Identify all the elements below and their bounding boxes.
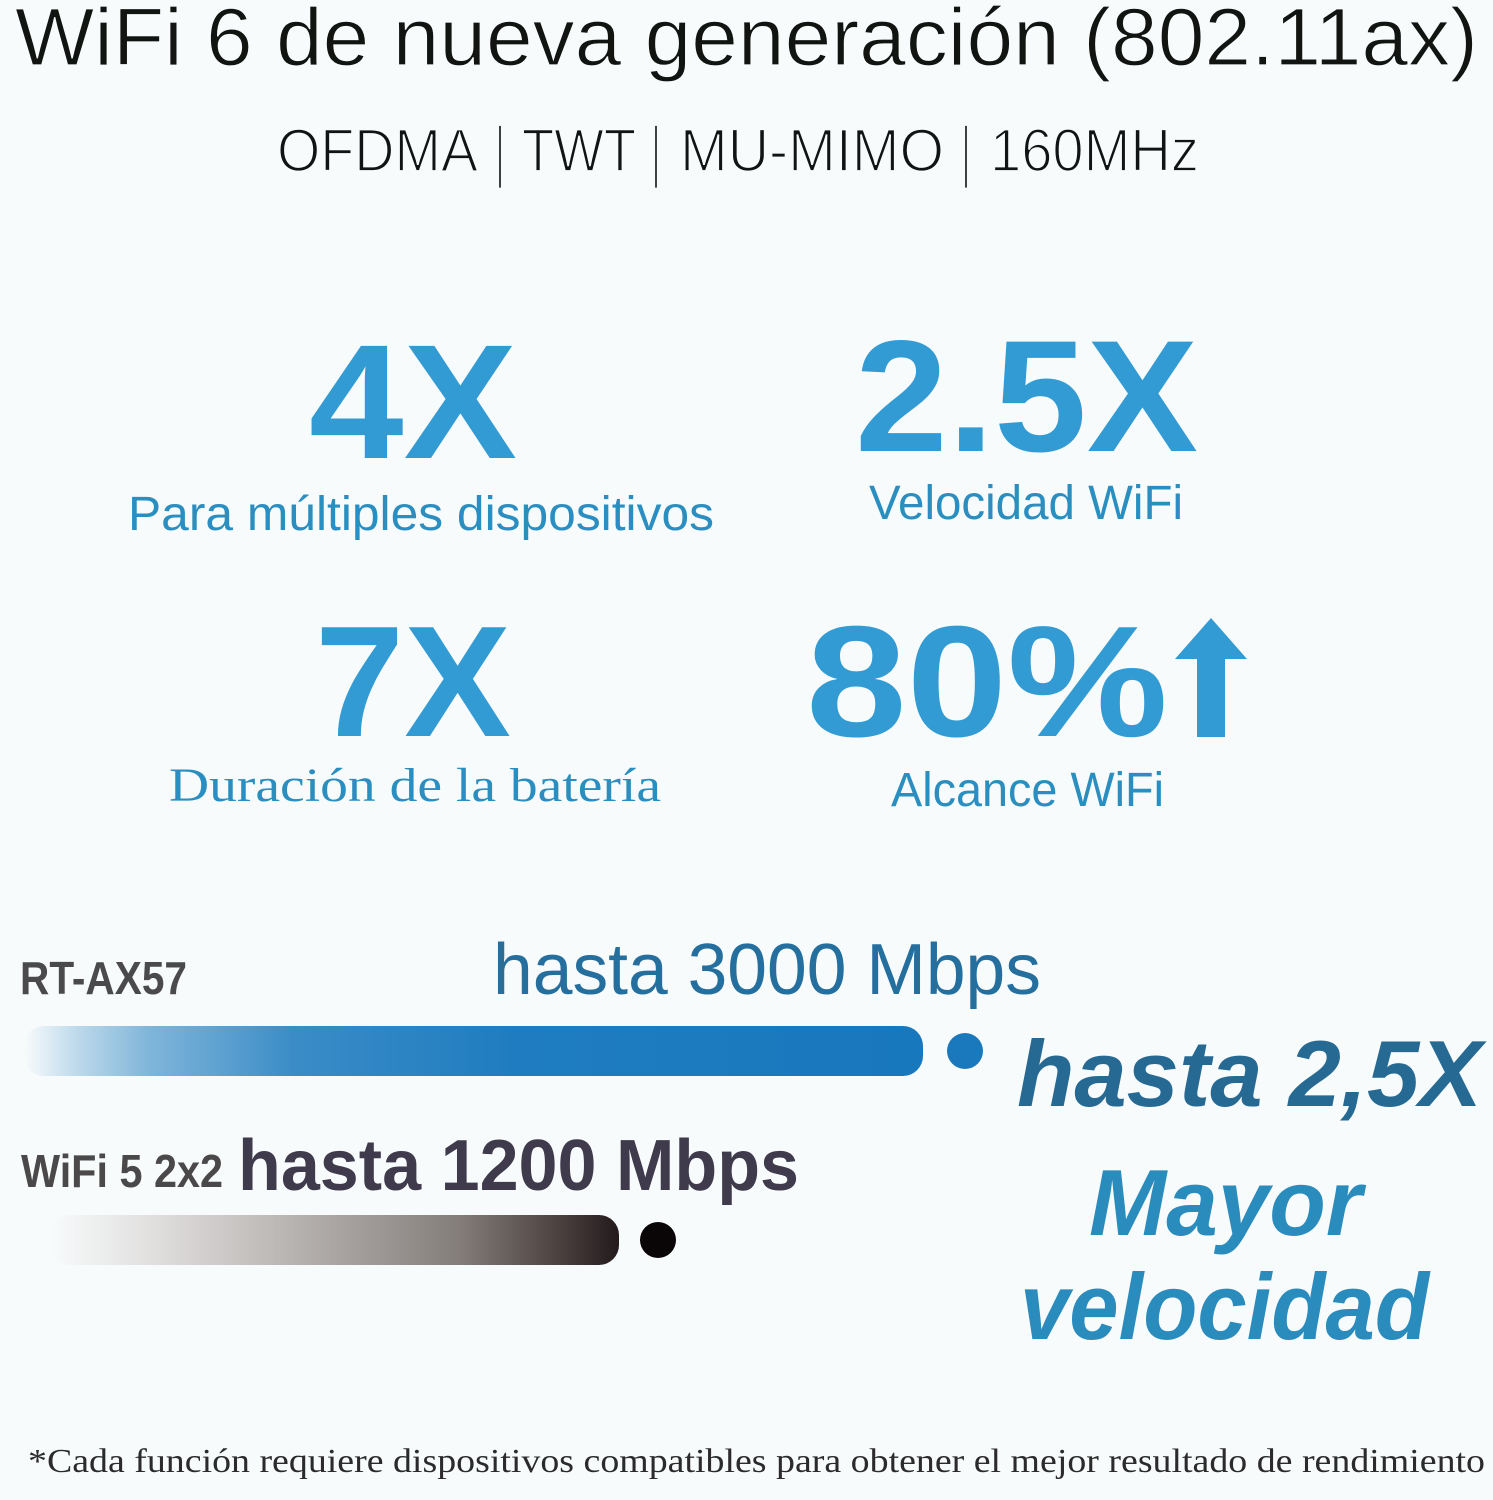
subtitle: TWT bbox=[522, 117, 636, 184]
callout: Mayor velocidad bbox=[1020, 1150, 1431, 1359]
label: Velocidad WiFi: Velocidad WiFi bbox=[869, 477, 1183, 530]
subtitle: MU-MIMO bbox=[680, 117, 944, 184]
stat: 4X bbox=[128, 310, 714, 541]
subtitle bbox=[277, 113, 1199, 189]
bar: WiFi 5 speed bbox=[50, 1215, 619, 1265]
subtitle: | bbox=[652, 113, 660, 189]
subtitle: | bbox=[962, 113, 970, 189]
label: Para múltiples dispositivos: Para múltiples dispositivos bbox=[128, 488, 714, 541]
stat: 7X: 7X bbox=[315, 594, 511, 770]
callout: hasta 2,5X: hasta 2,5X bbox=[1017, 1021, 1487, 1126]
label: Alcance WiFi: Alcance WiFi bbox=[891, 764, 1164, 817]
subtitle: OFDMA bbox=[277, 117, 478, 184]
label: RT-AX57: RT-AX57 bbox=[20, 952, 187, 1004]
bar: RT-AX57 speed bbox=[24, 1026, 923, 1076]
label: WiFi 5 2x2: WiFi 5 2x2 bbox=[21, 1145, 223, 1197]
label: Duración de la batería: Duración de la batería bbox=[169, 759, 661, 812]
speed: hasta 3000 Mbps: hasta 3000 Mbps bbox=[493, 930, 1041, 1010]
dot: blue bbox=[947, 1033, 983, 1069]
dot: black bbox=[640, 1222, 676, 1258]
stat: 80% with up arrow bbox=[806, 594, 1247, 817]
subtitle: | bbox=[496, 113, 504, 189]
footnote: *Cada función requiere dispositivos compatibles para obtener el mejor resultado de rendimiento bbox=[28, 1443, 1485, 1480]
callout: Mayor velocidad: velocidad bbox=[1020, 1254, 1431, 1359]
stat: 7X bbox=[169, 594, 661, 812]
stat: 4X: 4X bbox=[309, 310, 517, 493]
icon: up arrow bbox=[1175, 618, 1247, 737]
speed: hasta 1200 Mbps: hasta 1200 Mbps bbox=[238, 1126, 799, 1206]
callout: Mayor velocidad: Mayor bbox=[1089, 1150, 1366, 1255]
stat: 80% with up arrow: 80% bbox=[806, 594, 1168, 770]
stat: 2.5X: 2.5X bbox=[855, 307, 1198, 485]
subtitle: 160MHz bbox=[990, 117, 1199, 184]
